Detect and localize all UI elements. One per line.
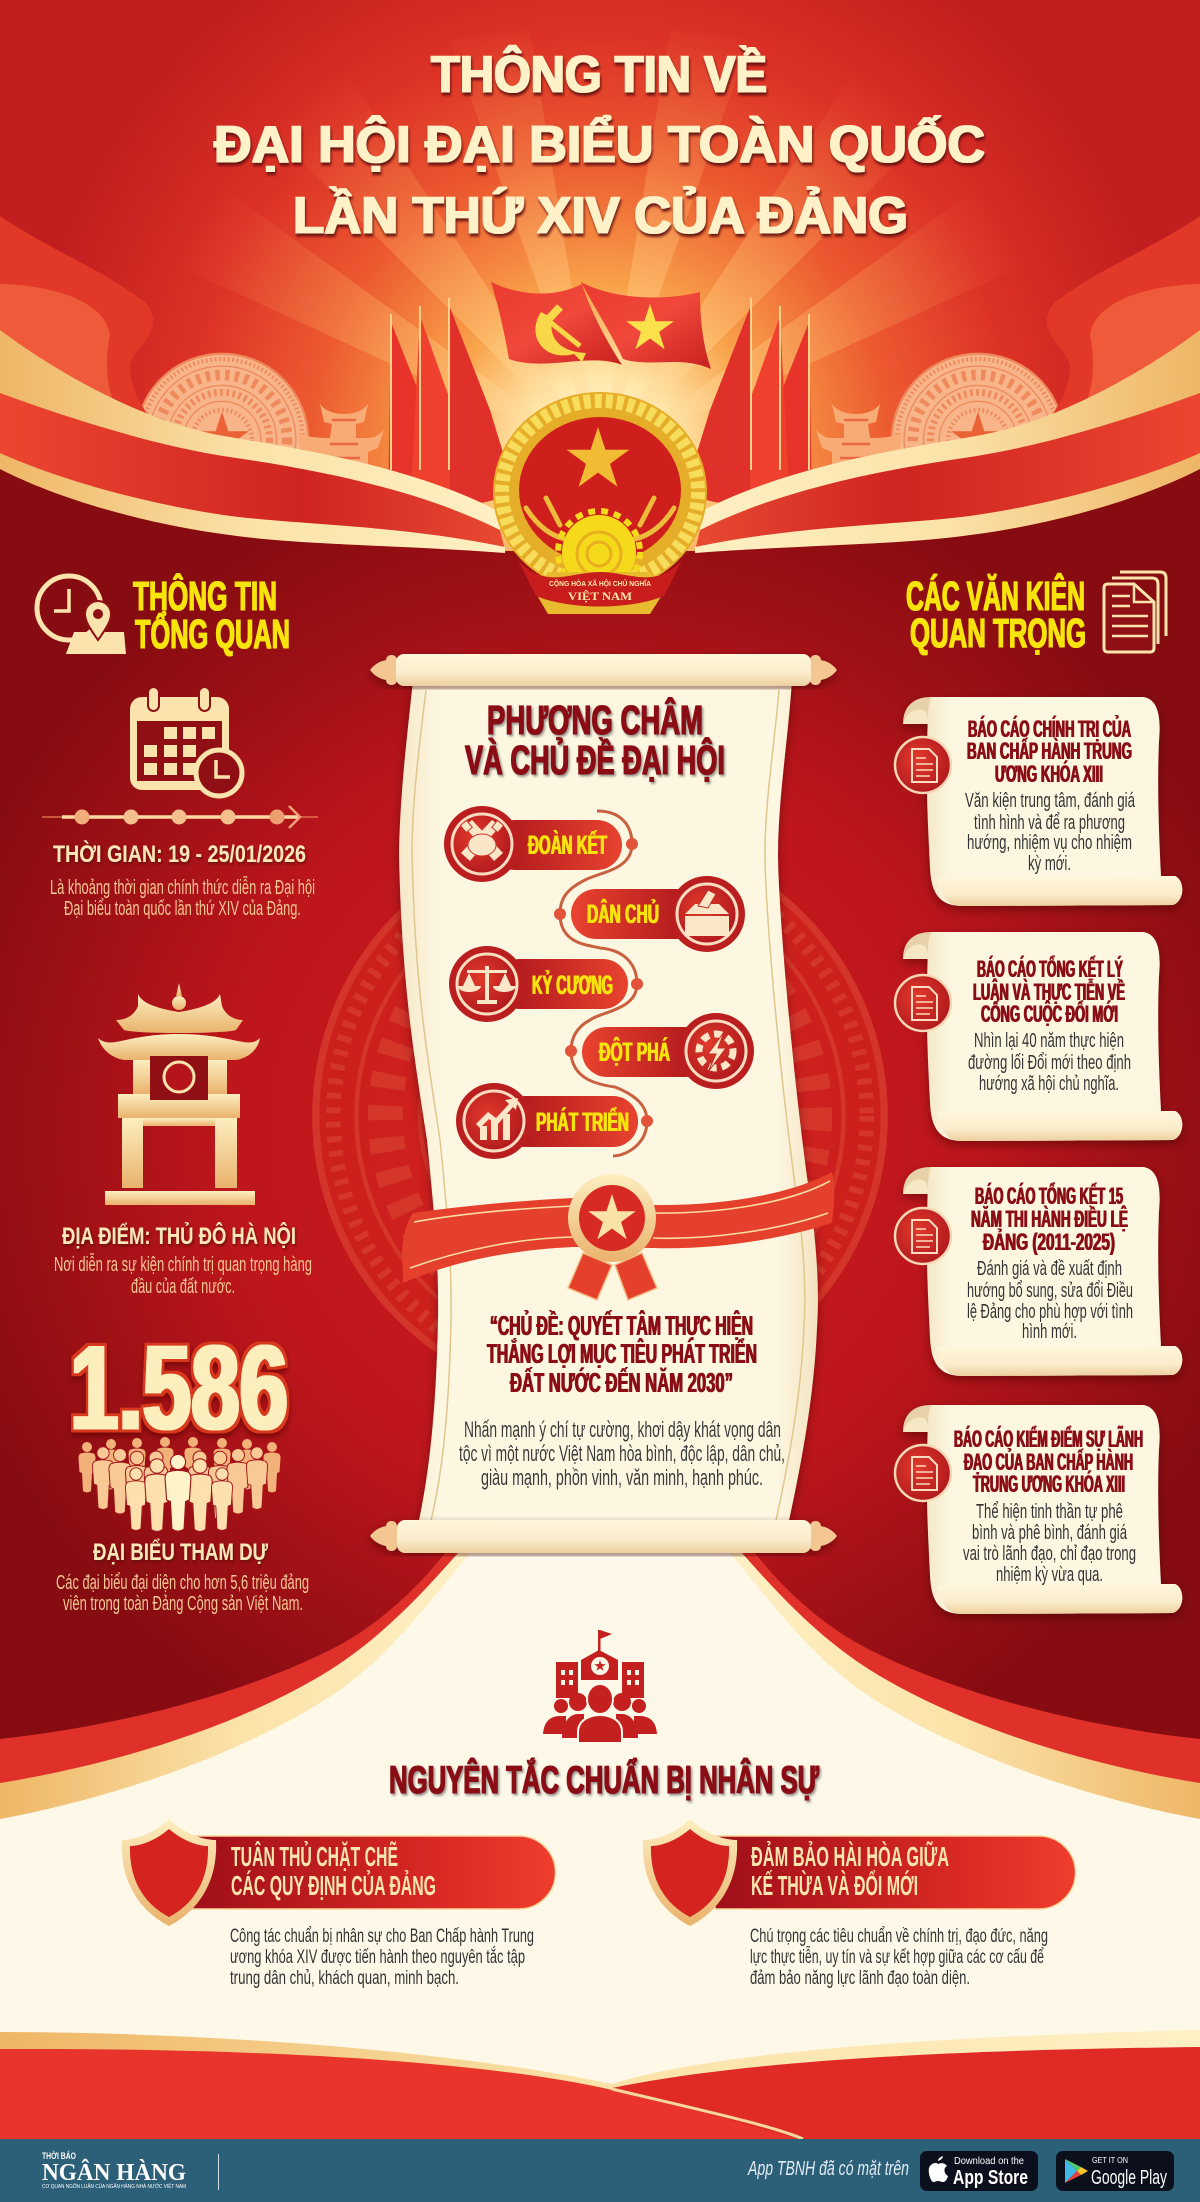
- drape left: [0, 216, 160, 432]
- icon: building and personnel: [543, 1630, 657, 1743]
- icon: ballot box: [685, 890, 729, 936]
- bottom ribbon waves: [0, 2030, 1200, 2140]
- icon: document stack: [1104, 572, 1166, 652]
- icon: document: [895, 737, 951, 793]
- text: địa điểm: ĐỊA ĐIỂM: THỦ ĐÔ HÀ NỘI: [62, 1221, 296, 1250]
- body text: Công tác chuẩn bị nhân sự cho Ban Chấp hành Trung: [230, 1926, 534, 1947]
- heading: phương châm: VÀ CHỦ ĐỀ ĐẠI HỘI: [465, 737, 725, 783]
- footer logo: NGÂN HÀNG: [42, 2159, 186, 2186]
- pagoda left: [298, 404, 384, 476]
- title: [214, 45, 985, 245]
- text: đại biểu tham dự: viên trong toàn Đảng Cộng sản Việt Nam.: [63, 1593, 303, 1615]
- icon: crowd of delegates: [78, 1437, 280, 1532]
- pill: dân chủ: [554, 876, 745, 952]
- title: THÔNG TIN VỀ: [431, 45, 767, 104]
- card: báo cáo điều lệ: ĐẢNG (2011-2025): [983, 1227, 1115, 1256]
- theme description: giàu mạnh, phồn vinh, văn minh, hạnh phúc.: [481, 1465, 763, 1490]
- theme statement: THẮNG LỢI MỤC TIÊU PHÁT TRIỂN: [487, 1338, 757, 1369]
- theme statement: ĐẤT NƯỚC ĐẾN NĂM 2030”: [510, 1367, 733, 1398]
- pill: đột phá: [565, 1013, 754, 1089]
- icon: document: [895, 1208, 951, 1264]
- footer logo: [42, 2150, 186, 2190]
- button: google play: Google Play: [1091, 2167, 1167, 2189]
- banner: [715, 1836, 1076, 1909]
- body text: ương khóa XIV được tiến hành theo nguyên tắc tập: [230, 1946, 525, 1968]
- drum motif left: [136, 354, 308, 526]
- footer logo: CƠ QUAN NGÔN LUẬN CỦA NGÂN HÀNG NHÀ NƯỚC VIỆT NAM: [42, 2182, 186, 2190]
- icon: document: [895, 1445, 951, 1501]
- footer app text: App TBNH đã có mặt trên: [747, 2158, 909, 2180]
- heading: thông tin tổng quan: THÔNG TIN: [133, 573, 277, 619]
- card: báo cáo tổng kết lý luận: Nhìn lại 40 năm thực hiện: [974, 1030, 1124, 1052]
- ribbon bands left: [0, 330, 505, 553]
- drape right: [1040, 216, 1200, 432]
- text: địa điểm: Nơi diễn ra sự kiện chính trị quan trọng hàng: [54, 1253, 312, 1276]
- theme description: [459, 1417, 785, 1490]
- text: thời gian: [50, 840, 315, 920]
- scroll inner line right: [765, 690, 805, 1525]
- scroll paper: [399, 680, 818, 1530]
- body text: lực thực tiễn, uy tín và sự kết hợp giữa các cơ cấu để: [750, 1946, 1044, 1968]
- icon: calendar: [130, 687, 242, 796]
- text: thời gian: THỜI GIAN: 19 - 25/01/2026: [53, 840, 306, 868]
- big drum behind scroll: [316, 832, 884, 1400]
- footer logo: THỜI BÁO: [42, 2150, 76, 2161]
- body text: [750, 1926, 1048, 1989]
- principle 2: ĐẢM BẢO HÀI HÒA GIỮA: [751, 1840, 949, 1872]
- connector path: [560, 811, 647, 1156]
- text: thời gian: Là khoảng thời gian chính thức diễn ra Đại hội: [50, 876, 315, 899]
- pill: kỷ cương: [449, 946, 643, 1022]
- icon: joined hands: [460, 820, 504, 861]
- icon: party flag: [491, 282, 622, 365]
- button: app store: App Store: [953, 2167, 1028, 2189]
- panel: central scroll: [370, 654, 837, 1553]
- icon: national flag: [581, 282, 711, 369]
- drum motif right: [892, 354, 1064, 526]
- theme description: Nhấn mạnh ý chí tự cường, khơi dậy khát vọng dân: [464, 1417, 781, 1442]
- ribbon across scroll: [402, 1172, 834, 1300]
- card: báo cáo chính trị: [895, 697, 1182, 906]
- pill: phát triển: PHÁT TRIỂN: [536, 1106, 629, 1137]
- text: đại biểu tham dự: [56, 1538, 309, 1615]
- heading: phương châm: PHƯƠNG CHÂM: [487, 697, 703, 743]
- button: google play: GET IT ON: [1092, 2156, 1128, 2165]
- icon: national emblem: [493, 392, 707, 614]
- principle 1: TUÂN THỦ CHẶT CHẼ: [231, 1840, 398, 1872]
- curtain right: [730, 1553, 1200, 1819]
- card: báo cáo điều lệ: Đánh giá và đề xuất định: [977, 1258, 1122, 1280]
- icon: shield: [122, 1819, 216, 1926]
- icon: clock and map: [37, 576, 126, 654]
- principle 2: [643, 1819, 1076, 1989]
- pill: dân chủ: DÂN CHỦ: [587, 897, 659, 929]
- title: LẦN THỨ XIV CỦA ĐẢNG: [293, 186, 908, 245]
- card: báo cáo tổng kết lý luận: hướng xã hội chủ nghĩa.: [979, 1073, 1119, 1095]
- body text: trung dân chủ, khách quan, minh bạch.: [230, 1968, 459, 1989]
- text: đại biểu tham dự: ĐẠI BIỂU THAM DỰ: [93, 1538, 268, 1566]
- theme statement: “CHỦ ĐỀ: QUYẾT TÂM THỰC HIỆN: [490, 1309, 753, 1341]
- icon: gear and bolt: [699, 1032, 733, 1072]
- cream lower section: [0, 1553, 1200, 2143]
- timeline arrow: [42, 806, 318, 828]
- icon: growth chart: [476, 1098, 518, 1140]
- card: báo cáo kiểm điểm: nhiệm kỳ vừa qua.: [996, 1564, 1103, 1586]
- top roller: [370, 654, 837, 686]
- card: báo cáo chính trị: tình hình và để ra phương: [974, 812, 1125, 834]
- card: báo cáo kiểm điểm: [895, 1405, 1182, 1614]
- card: báo cáo kiểm điểm: Thể hiện tinh thần tự phê: [976, 1501, 1123, 1523]
- side flags left: [388, 298, 516, 510]
- icon: shield: [643, 1819, 737, 1926]
- pill: kỷ cương: KỶ CƯƠNG: [532, 968, 613, 1000]
- body text: [230, 1926, 534, 1989]
- text: địa điểm: [54, 1221, 312, 1298]
- pill: đột phá: ĐỘT PHÁ: [599, 1036, 670, 1067]
- pill: đoàn kết: [444, 806, 638, 882]
- text: địa điểm: đầu của đất nước.: [131, 1276, 235, 1298]
- card: báo cáo điều lệ: hình mới.: [1022, 1321, 1077, 1343]
- icon: national emblem: VIỆT NAM: [568, 589, 632, 603]
- pagoda right: [816, 404, 902, 476]
- button: app store: Download on the: [954, 2156, 1024, 2167]
- background: bright sky with sun glow: [0, 0, 1200, 570]
- theme description: tộc vì một nước Việt Nam hòa bình, độc lập, dân chủ,: [459, 1441, 785, 1466]
- heading: nguyên tắc chuẩn bị nhân sự: NGUYÊN TẮC CHUẨN BỊ NHÂN SỰ: [389, 1757, 819, 1802]
- button: google play: [1056, 2151, 1174, 2191]
- heading: các văn kiện: QUAN TRỌNG: [910, 610, 1086, 656]
- title: ĐẠI HỘI ĐẠI BIỂU TOÀN QUỐC: [214, 115, 985, 174]
- body text: đảm bảo năng lực lãnh đạo toàn diện.: [750, 1968, 970, 1989]
- heading: phương châm: [465, 697, 725, 783]
- card: báo cáo chính trị: kỳ mới.: [1028, 853, 1071, 875]
- banner: [191, 1836, 556, 1909]
- number: 1.586: 1.586: [70, 1321, 288, 1455]
- button: app store: [920, 2151, 1038, 2191]
- heading: thông tin tổng quan: TỔNG QUAN: [135, 610, 290, 657]
- scroll inner line left: [412, 690, 451, 1525]
- heading: thông tin tổng quan: [37, 573, 290, 657]
- text: thời gian: Đại biểu toàn quốc lần thứ XIV của Đảng.: [64, 898, 301, 920]
- pill: đoàn kết: ĐOÀN KẾT: [528, 829, 607, 860]
- card: báo cáo chính trị: ƯƠNG KHÓA XIII: [995, 760, 1103, 788]
- pill: phát triển: [456, 1083, 653, 1159]
- footer bar: [0, 2139, 1200, 2202]
- icon: national emblem: CỘNG HÒA XÃ HỘI CHỦ NGHĨA: [549, 579, 652, 588]
- side flags right: [684, 298, 812, 510]
- card: báo cáo tổng kết lý luận: [895, 932, 1182, 1141]
- principle 2: KẾ THỪA VÀ ĐỔI MỚI: [751, 1870, 918, 1901]
- body text: Chú trọng các tiêu chuẩn về chính trị, đạo đức, năng: [750, 1926, 1048, 1947]
- theme statement: [487, 1309, 757, 1398]
- card: báo cáo điều lệ: [895, 1167, 1182, 1376]
- icon: document: [895, 975, 951, 1031]
- bottom roller: [370, 1520, 837, 1553]
- principle 1: CÁC QUY ĐỊNH CỦA ĐẢNG: [231, 1869, 436, 1901]
- dark field closing under the header: [0, 465, 1200, 600]
- heading: các văn kiện: CÁC VĂN KIÊN: [906, 573, 1085, 619]
- text: đại biểu tham dự: Các đại biểu đại diện cho hơn 5,6 triệu đảng: [56, 1572, 309, 1594]
- icon: temple gate: [98, 983, 260, 1205]
- curtain left: [0, 1553, 470, 1819]
- principle 1: [122, 1819, 555, 1989]
- heading: các văn kiện: [906, 572, 1166, 656]
- icon: scales: [458, 966, 516, 1004]
- ribbon bands right: [695, 330, 1200, 553]
